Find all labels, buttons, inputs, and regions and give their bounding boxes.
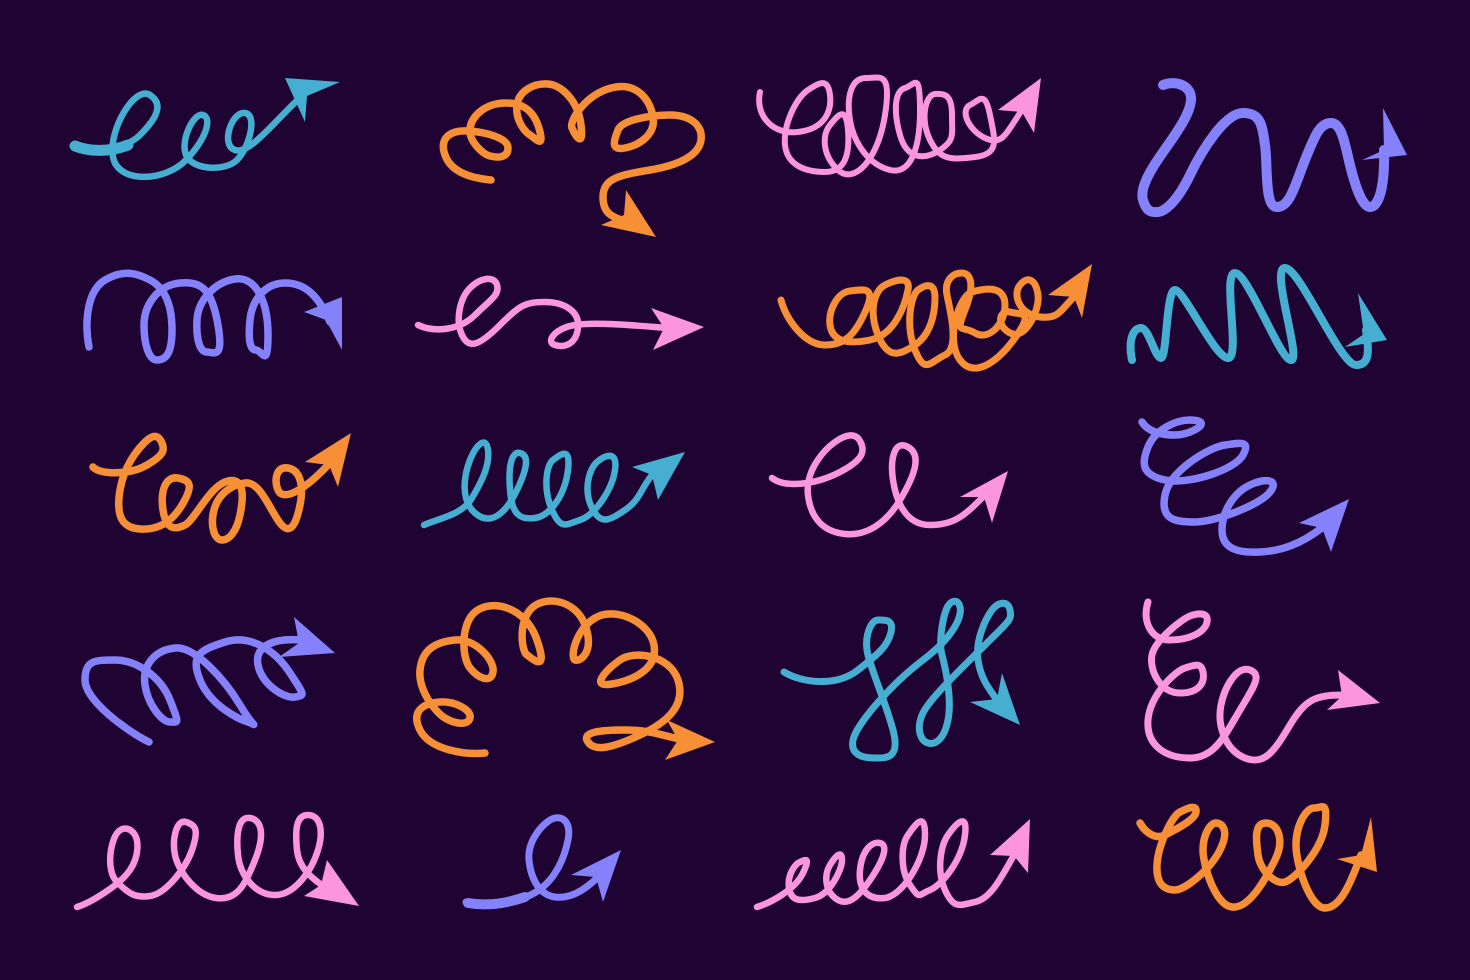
arrow: violet wave r1c4 xyxy=(1142,83,1407,212)
arrow: teal ascending loops r3c2 xyxy=(424,443,685,525)
arrow: orange scribble r2c3 xyxy=(781,264,1092,368)
arrow: pink small loops r5c3 xyxy=(757,819,1030,907)
arrow: orange big cloud r4c2 xyxy=(417,601,715,760)
arrow: teal wave r2c4 xyxy=(1131,268,1387,365)
arrow: teal S loops r4c3 xyxy=(784,601,1020,758)
arrow: violet descending loops r3c4 xyxy=(1142,420,1349,552)
arrow: orange wide loops r5c4 xyxy=(1140,807,1377,908)
arrow: violet coils r2c1 xyxy=(87,273,342,360)
arrow: pink straight r2c2 xyxy=(418,279,704,350)
arrow: pink descending loops r4c4 xyxy=(1146,602,1380,760)
arrow: pink two loops r3c3 xyxy=(772,435,1008,534)
arrow: violet spring r4c1 xyxy=(85,617,335,742)
arrow: violet small r5c2 xyxy=(466,818,621,905)
arrow: pink loops r5c1 xyxy=(77,815,359,907)
arrow: pink scribble r1c3 xyxy=(759,77,1041,174)
arrow: orange cloud r1c2 xyxy=(443,84,701,237)
arrow: orange love loops r3c1 xyxy=(93,433,351,540)
arrow: teal loops r1c1 xyxy=(73,78,340,177)
